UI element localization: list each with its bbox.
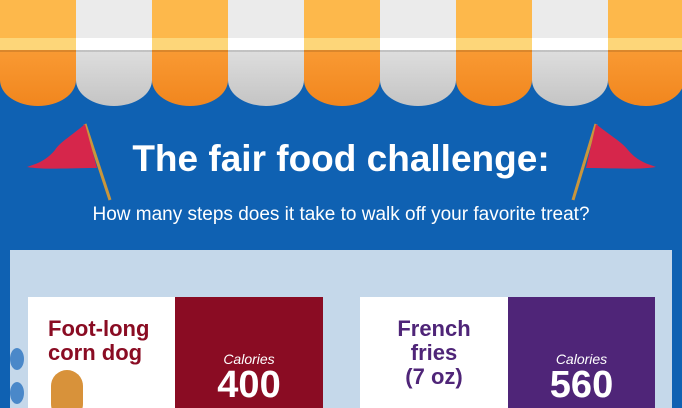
name: fries (411, 340, 457, 365)
name: French (397, 316, 471, 341)
subtitle: How many steps does it take to walk off your favorite treat? (92, 204, 590, 225)
calories: Calories (223, 351, 275, 367)
name (360, 297, 508, 408)
name: Foot-long (48, 316, 149, 341)
icon: footprints (10, 348, 24, 404)
name (28, 297, 175, 408)
icon: left flag (27, 124, 112, 200)
calories (175, 297, 323, 408)
icon: right flag (572, 124, 656, 200)
name: (7 oz) (405, 364, 463, 389)
name: corn dog (48, 340, 142, 365)
calories: 560 (550, 364, 613, 406)
card: corn dog (28, 297, 323, 408)
title: The fair food challenge: (132, 138, 550, 179)
calories (508, 297, 655, 408)
card: fries (360, 297, 655, 408)
awning (0, 0, 682, 106)
panel: content (10, 250, 672, 408)
icon: corn dog (51, 370, 83, 408)
calories: 400 (217, 364, 281, 406)
calories: Calories (556, 351, 607, 367)
